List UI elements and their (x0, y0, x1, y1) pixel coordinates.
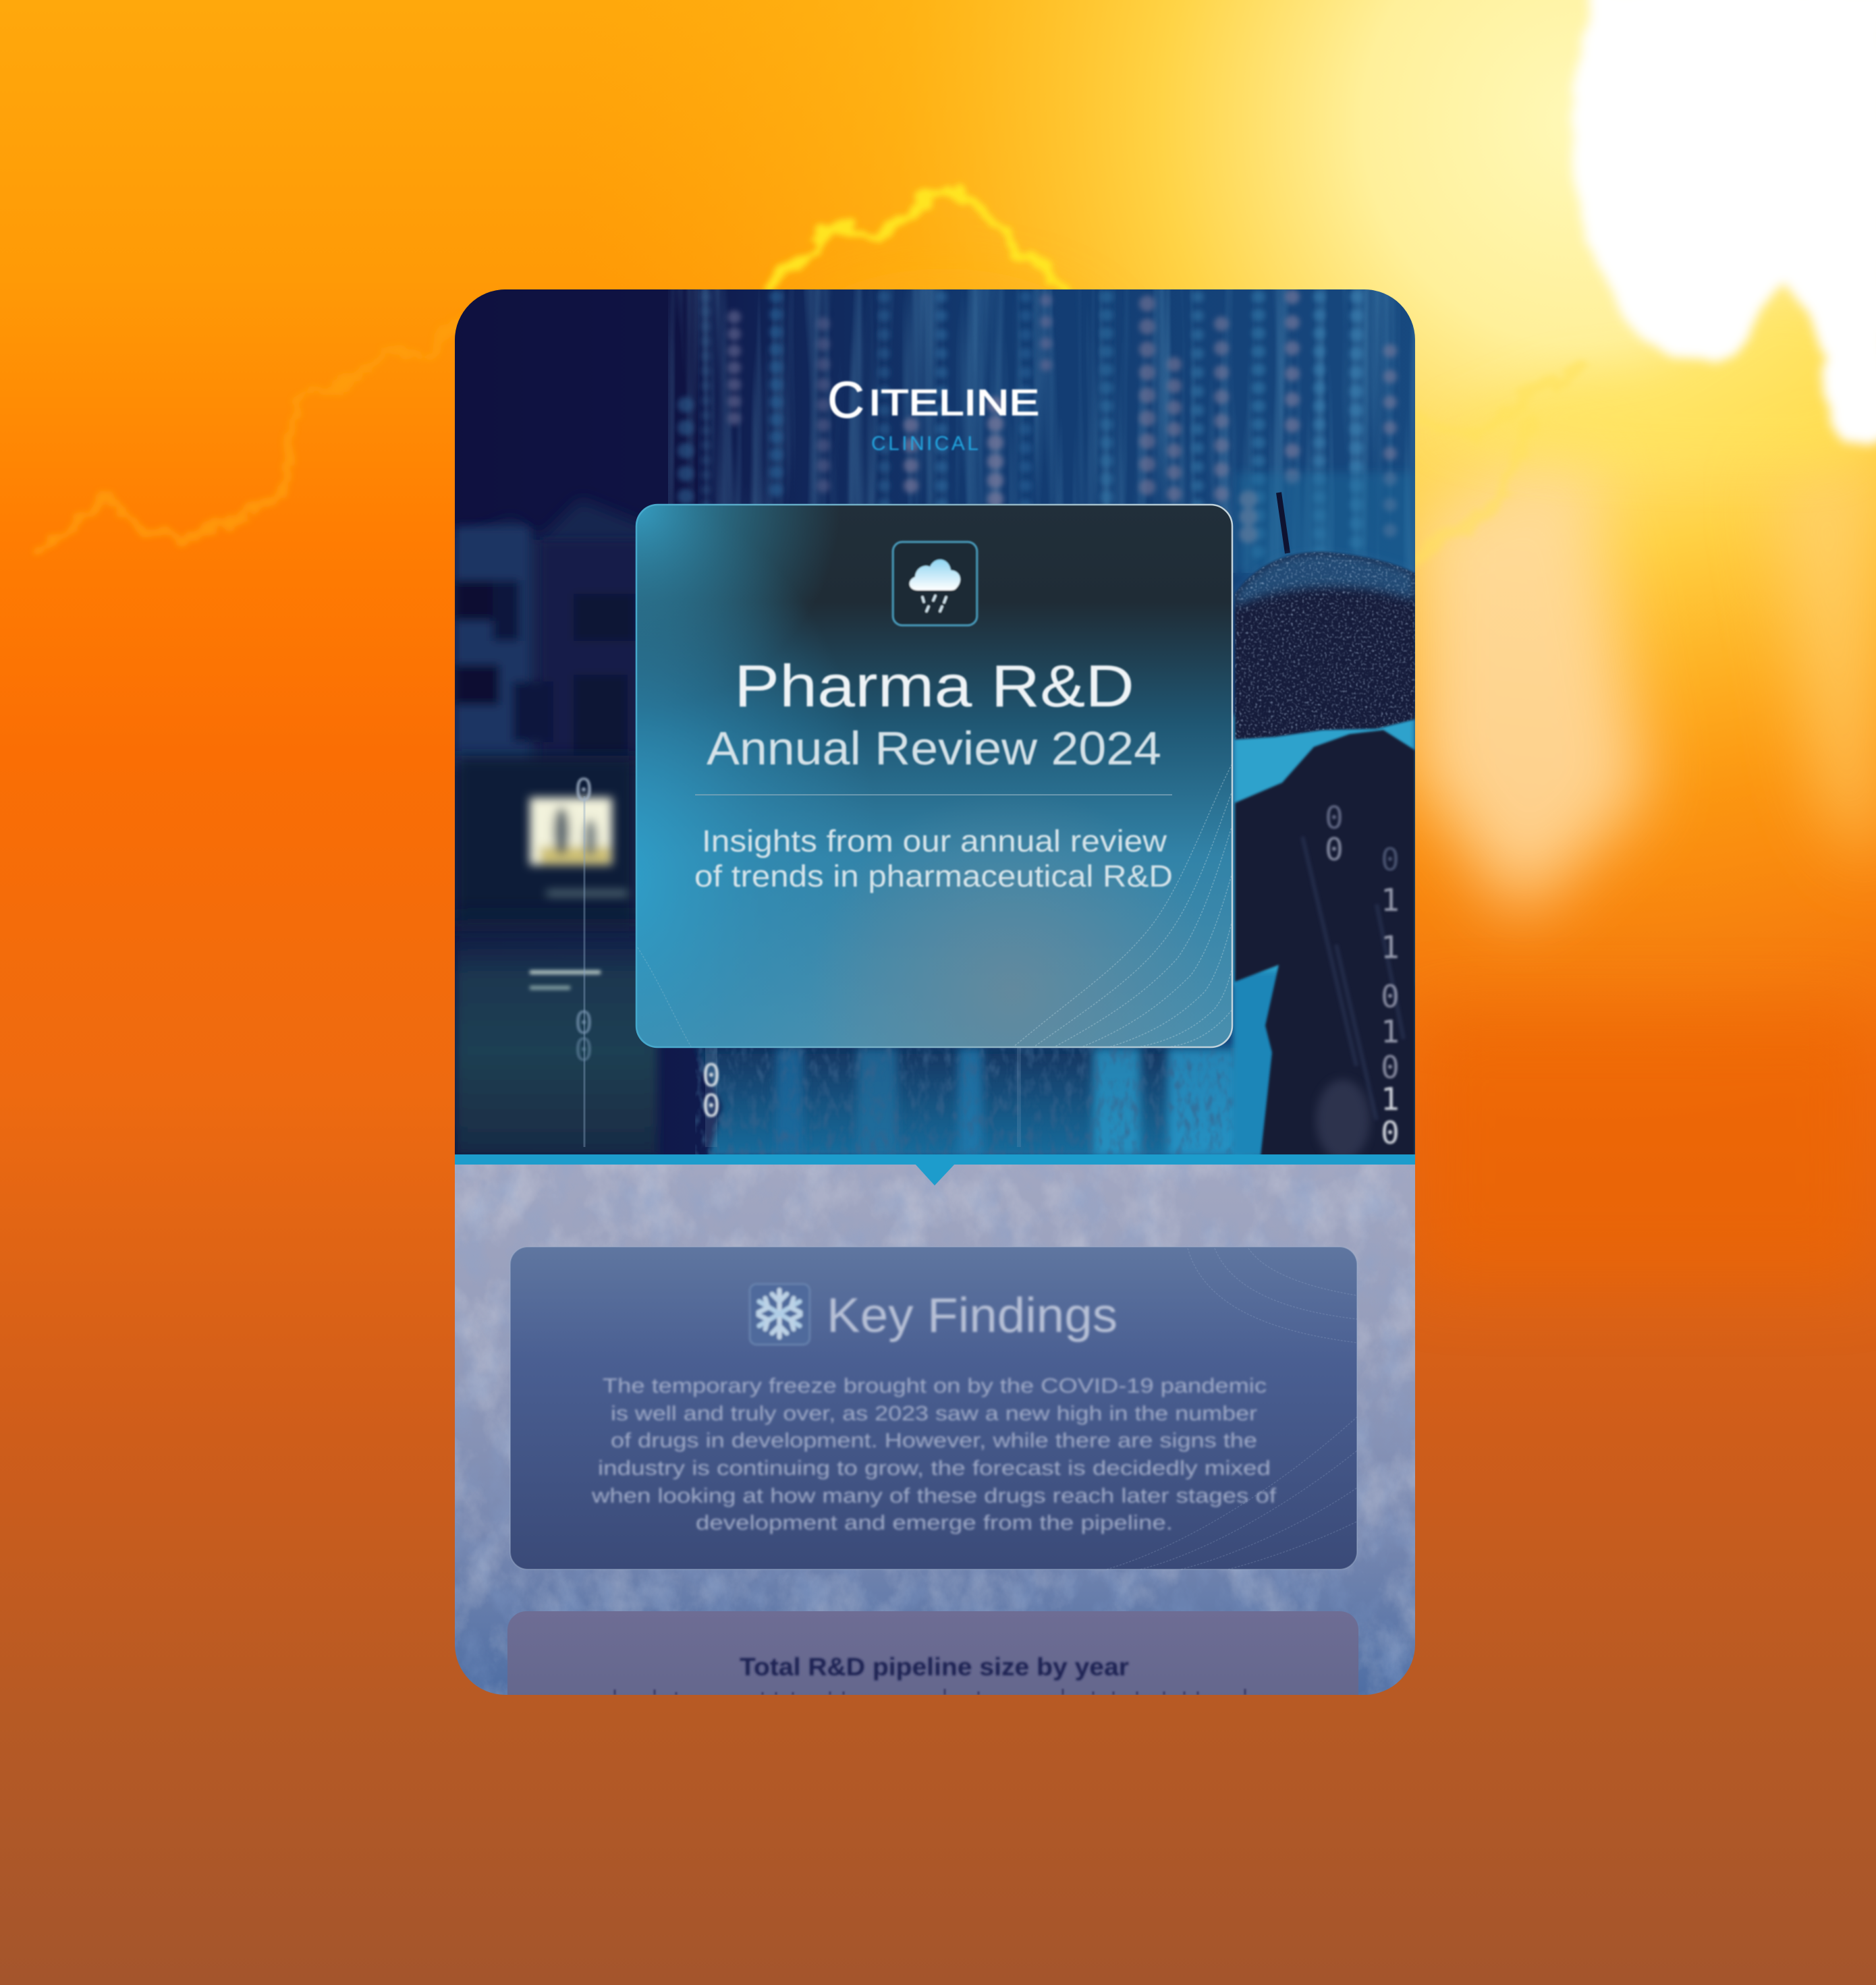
falling binary digits: 0 (1381, 1049, 1400, 1086)
pipeline size box (507, 1611, 1358, 1714)
falling binary digits: 0 (702, 1057, 721, 1094)
sun (1431, 0, 1876, 466)
hero description (694, 824, 1173, 893)
city buildings and wet street (455, 499, 657, 1155)
falling binary digits (574, 772, 1400, 1151)
key findings paragraph: The temporary freeze brought on by the COVID-19 pandemic (603, 1374, 1267, 1397)
hero description: Insights from our annual review (702, 824, 1167, 858)
section band (455, 1154, 1415, 1165)
hero description: of trends in pharmaceutical R&D (694, 859, 1173, 893)
icon: snowflake (750, 1284, 810, 1345)
heading: Key Findings: Key Findings (827, 1289, 1118, 1343)
key findings box (510, 1247, 1357, 1569)
subtitle: Annual Review 2024: Annual Review 2024 (707, 722, 1161, 775)
falling binary digits: 0 (1325, 800, 1344, 836)
key findings paragraph: development and emerge from the pipeline. (696, 1511, 1173, 1534)
falling binary digits: 0 (574, 1005, 593, 1041)
falling binary digits: 0 (1325, 831, 1344, 868)
falling binary digits: 0 (702, 1088, 721, 1124)
divider (695, 794, 1172, 795)
logo: ITELINE (868, 383, 1039, 423)
falling binary digits: 0 (1381, 1115, 1400, 1151)
card (455, 289, 1415, 1714)
hero photo panel (455, 289, 1415, 1161)
heading: Total R&D pipeline size by year: Total R&D pipeline size by year (740, 1653, 1129, 1681)
falling binary digits: 0 (574, 772, 593, 808)
figure with umbrella (1233, 493, 1415, 1161)
hero title box (636, 504, 1233, 1048)
falling binary digits: 1 (1381, 1013, 1400, 1050)
logo: CLINICAL (871, 432, 978, 455)
falling binary digits: 1 (1381, 929, 1400, 966)
title: Pharma R&D: Pharma R&D (734, 652, 1134, 719)
falling binary digits: 1 (1381, 882, 1400, 918)
pointer arrow (914, 1163, 956, 1185)
falling binary digits: 0 (574, 1032, 593, 1068)
falling binary digits: 0 (1381, 841, 1400, 878)
icon: rain cloud (893, 542, 977, 625)
cloud edges lit by sun (36, 189, 1586, 560)
logo (827, 372, 1039, 455)
falling binary digits: 1 (1381, 1081, 1400, 1117)
logo: C (827, 372, 864, 429)
frost panel (455, 1154, 1415, 1714)
key findings paragraph: when looking at how many of these drugs reach later stages of (591, 1484, 1276, 1507)
clipped next line of text (615, 1689, 1245, 1695)
key findings paragraph: industry is continuing to grow, the forecast is decidedly mixed (598, 1456, 1271, 1480)
lit shop window (530, 798, 628, 896)
key findings paragraph: of drugs in development. However, while there are signs the (611, 1428, 1257, 1452)
falling binary digits: 0 (1381, 978, 1400, 1015)
key findings paragraph (591, 1374, 1276, 1534)
key findings paragraph: is well and truly over, as 2023 saw a new high in the number (611, 1401, 1257, 1425)
